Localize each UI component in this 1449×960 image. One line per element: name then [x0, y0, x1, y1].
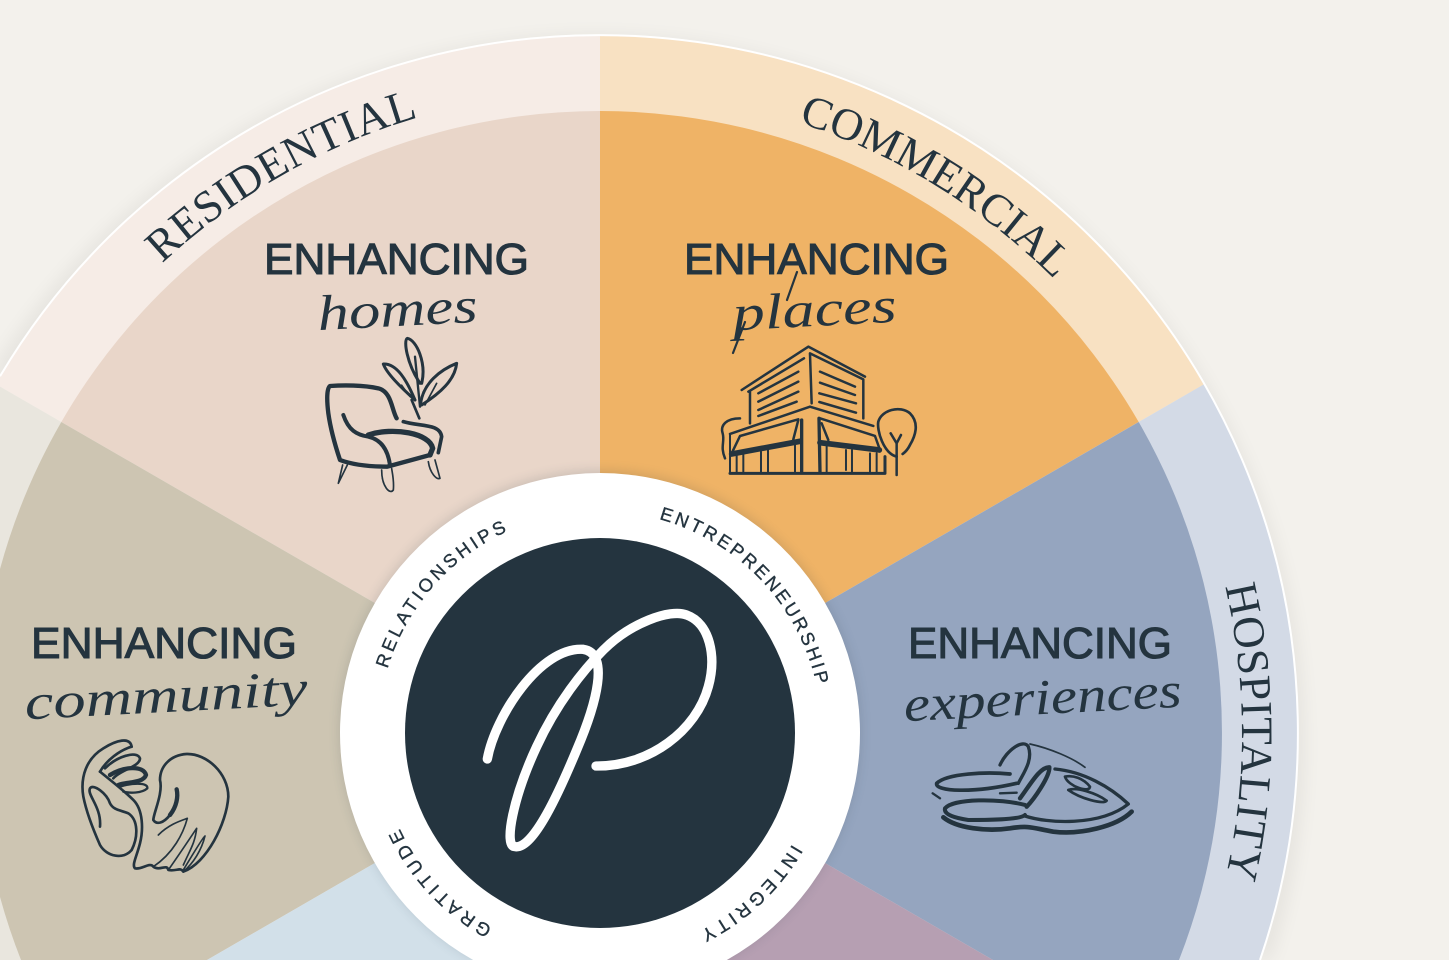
value: integrity: INTEGRITY [704, 845, 803, 942]
hospitality outer band [600, 384, 1298, 960]
value: relationships: RELATIONSHIPS [376, 521, 506, 668]
heading: enhancing homes [264, 235, 529, 341]
white ring [340, 473, 860, 960]
commercial label: COMMERCIAL [804, 98, 1066, 278]
heading: enhancing homes: ENHANCING [264, 235, 529, 284]
panel: hospitality [825, 384, 1297, 960]
heading: enhancing experiences: experiences [902, 662, 1183, 732]
panel: residential [0, 36, 600, 603]
heading: enhancing places: places [727, 277, 898, 341]
heading: enhancing experiences: ENHANCING [908, 619, 1172, 668]
hub shadow [340, 471, 860, 958]
heading: enhancing experiences [902, 619, 1183, 732]
residential wedge [61, 111, 600, 733]
icon: building and tree [722, 347, 916, 475]
heading: enhancing places [684, 235, 949, 353]
icon: armchair and plant [327, 338, 457, 491]
panel: lower left wedge [207, 733, 600, 960]
heading: enhancing places: ENHANCING [684, 235, 949, 284]
icon: hands [82, 740, 228, 872]
community wedge [0, 422, 600, 960]
center hub [340, 473, 860, 960]
heading: enhancing community [23, 619, 310, 730]
community outer band [0, 387, 600, 960]
heading: enhancing homes: homes [316, 277, 479, 341]
residential label: RESIDENTIAL [144, 93, 416, 262]
hospitality wedge [600, 422, 1222, 960]
value: entrepreneurship: ENTREPRENEURSHIP [660, 507, 828, 682]
panel: lower right wedge [600, 733, 993, 960]
hospitality label: HOSPITALITY [1226, 582, 1272, 882]
panel: commercial [600, 36, 1204, 603]
commercial outer band [600, 35, 1204, 733]
value: gratitude: GRATITUDE [388, 829, 490, 936]
icon: script P logo [487, 613, 712, 847]
icon: slippers [933, 744, 1132, 832]
heading: enhancing community: community [23, 660, 310, 730]
residential outer band [0, 35, 600, 733]
panel: community [0, 387, 600, 960]
commercial wedge [600, 111, 1139, 733]
heading: enhancing community: ENHANCING [31, 619, 297, 668]
dark circle [405, 538, 795, 928]
